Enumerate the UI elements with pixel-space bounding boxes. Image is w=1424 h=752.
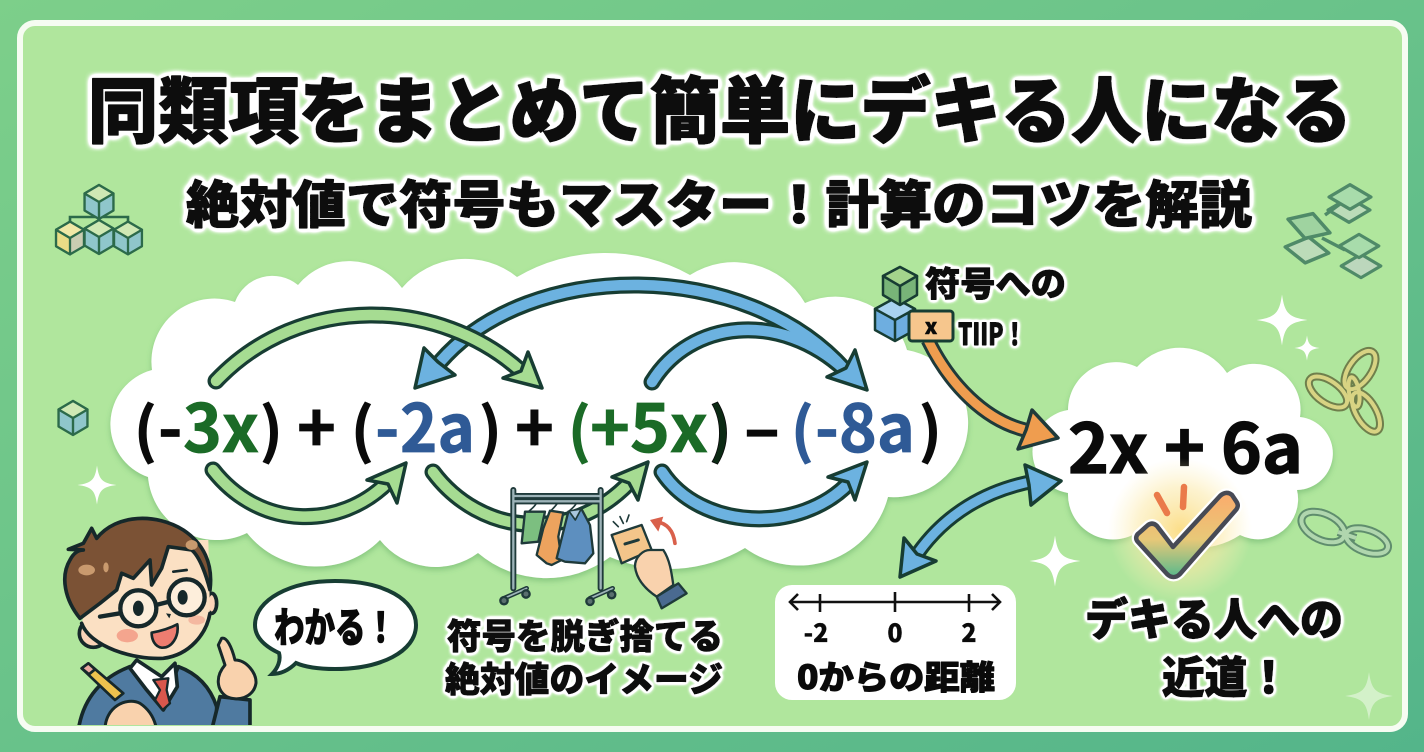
tie — [153, 678, 170, 710]
formula: ( — [134, 383, 157, 470]
number line panel: 2 — [961, 614, 977, 650]
arrow: green bottom middle — [433, 462, 648, 525]
icon: cube network — [56, 185, 142, 254]
left ear — [78, 624, 102, 650]
formula: 3x — [183, 376, 259, 472]
icon: green chain — [1297, 505, 1391, 559]
character — [65, 518, 256, 730]
pencil eraser — [82, 663, 95, 674]
formula: ) — [709, 383, 732, 470]
collar — [130, 660, 177, 710]
tip label: TIIP！ — [958, 310, 1026, 354]
formula: ( — [568, 383, 591, 470]
formula: ( — [791, 383, 814, 470]
formula: 2a — [400, 376, 475, 472]
arrow: blue double number line — [900, 465, 1061, 577]
eyes — [133, 590, 188, 618]
caption: rack: 符号を脱ぎ捨てる — [447, 609, 723, 660]
glow and check mark — [1108, 458, 1252, 602]
glasses — [100, 579, 205, 626]
speech bubble — [255, 581, 416, 674]
tip label — [925, 257, 1066, 354]
caption: shortcut: 近道！ — [1162, 642, 1290, 706]
sparkles — [78, 294, 1393, 720]
icon: connected chain blocks — [1283, 185, 1381, 278]
formula: ) — [479, 383, 502, 470]
icon: boxes with x tag: x — [925, 311, 938, 341]
arrow: green top — [216, 315, 542, 388]
hair highlights — [78, 540, 198, 575]
formula: + — [297, 376, 336, 472]
cheeks — [117, 629, 138, 642]
face outline — [82, 613, 210, 658]
answer text: 2x + 6a — [1068, 394, 1303, 493]
pencil — [82, 663, 123, 700]
formula: ) — [260, 383, 283, 470]
pointing hand — [218, 638, 256, 699]
number line panel — [775, 585, 1016, 700]
title: 同類項をまとめて簡単にデキる人になる — [88, 53, 1352, 158]
mouth — [152, 624, 178, 648]
number line panel: 0からの距離 — [797, 651, 995, 699]
formula: ( — [351, 383, 374, 470]
icon: hand holding minus card — [612, 515, 687, 608]
writing hand — [105, 701, 157, 730]
eyebrow — [173, 570, 187, 572]
arrow: blue bottom — [662, 462, 867, 519]
tip label: 符号への — [925, 257, 1066, 306]
formula — [134, 376, 942, 472]
number line panel: 0 — [887, 614, 903, 650]
arrow: orange — [928, 340, 1058, 449]
formula: -8a — [815, 376, 915, 472]
icon: boxes with x tag — [875, 267, 953, 341]
icon: small cube — [59, 401, 87, 435]
formula: - — [158, 376, 182, 472]
sleeve — [212, 697, 250, 730]
caption: shortcut — [1085, 584, 1343, 706]
arrow: green bottom left — [213, 463, 406, 517]
formula: - — [375, 376, 399, 472]
formula: +5x — [590, 376, 708, 472]
cloud: answer — [1032, 348, 1333, 548]
arrow: blue top double — [415, 285, 867, 390]
hair — [65, 518, 211, 618]
formula: ) — [919, 383, 942, 470]
formula: – — [744, 376, 780, 472]
right ear — [207, 593, 217, 613]
number line panel: -2 — [804, 614, 828, 650]
caption: rack — [445, 609, 723, 703]
face — [82, 540, 210, 658]
sweater — [78, 667, 217, 730]
cloud: formula — [110, 253, 968, 578]
subtitle: 絶対値で符号もマスター！計算のコツを解説 — [186, 164, 1252, 238]
caption: rack: 絶対値のイメージ — [445, 652, 723, 703]
formula: + — [515, 376, 554, 472]
icon: yellow chain — [1304, 346, 1386, 436]
icon: clothes rack — [500, 490, 615, 605]
caption: shortcut: デキる人への — [1085, 584, 1343, 648]
speech bubble: わかる！ — [274, 594, 396, 654]
